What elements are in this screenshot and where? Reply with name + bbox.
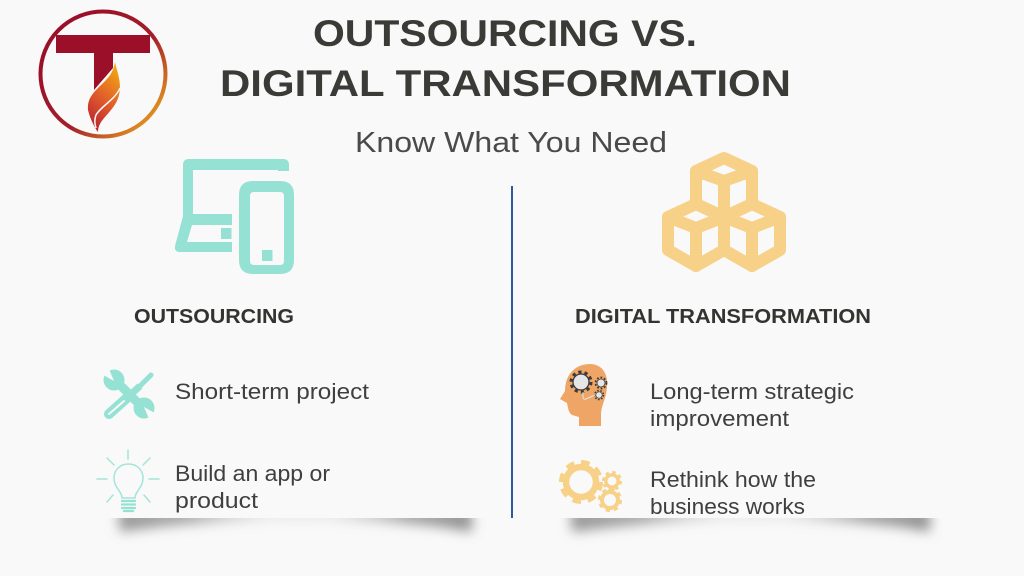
icon: laptop and phone — [175, 159, 294, 274]
text: rethink how the business works: business works — [650, 494, 805, 519]
icon: tools — [98, 362, 160, 426]
divider — [511, 186, 513, 518]
subtitle: Know What You Need — [355, 127, 667, 159]
icon: head with gears — [560, 364, 607, 426]
heading: outsourcing: OUTSOURCING — [134, 306, 294, 328]
logo — [40, 12, 166, 136]
text: long-term strategic improvement: improvement — [650, 406, 789, 431]
shadow: left — [118, 510, 472, 532]
text: short-term project: Short-term project — [175, 379, 369, 404]
text: long-term strategic improvement — [650, 379, 854, 431]
title — [220, 13, 791, 104]
heading: digital transformation: DIGITAL TRANSFORMATION — [575, 306, 871, 328]
shadow: right — [570, 510, 930, 532]
title: DIGITAL TRANSFORMATION — [220, 63, 791, 104]
text: build an app or product — [175, 461, 330, 513]
text: long-term strategic improvement: Long-term strategic — [650, 379, 854, 404]
icon: gears — [562, 462, 621, 511]
title: OUTSOURCING VS. — [313, 13, 697, 54]
text: build an app or product: Build an app or — [175, 461, 330, 486]
icon: light bulb — [97, 450, 159, 511]
icon: cubes — [668, 158, 780, 266]
text: build an app or product: product — [175, 488, 258, 513]
text: rethink how the business works: Rethink how the — [650, 467, 816, 492]
text: rethink how the business works — [650, 467, 816, 519]
